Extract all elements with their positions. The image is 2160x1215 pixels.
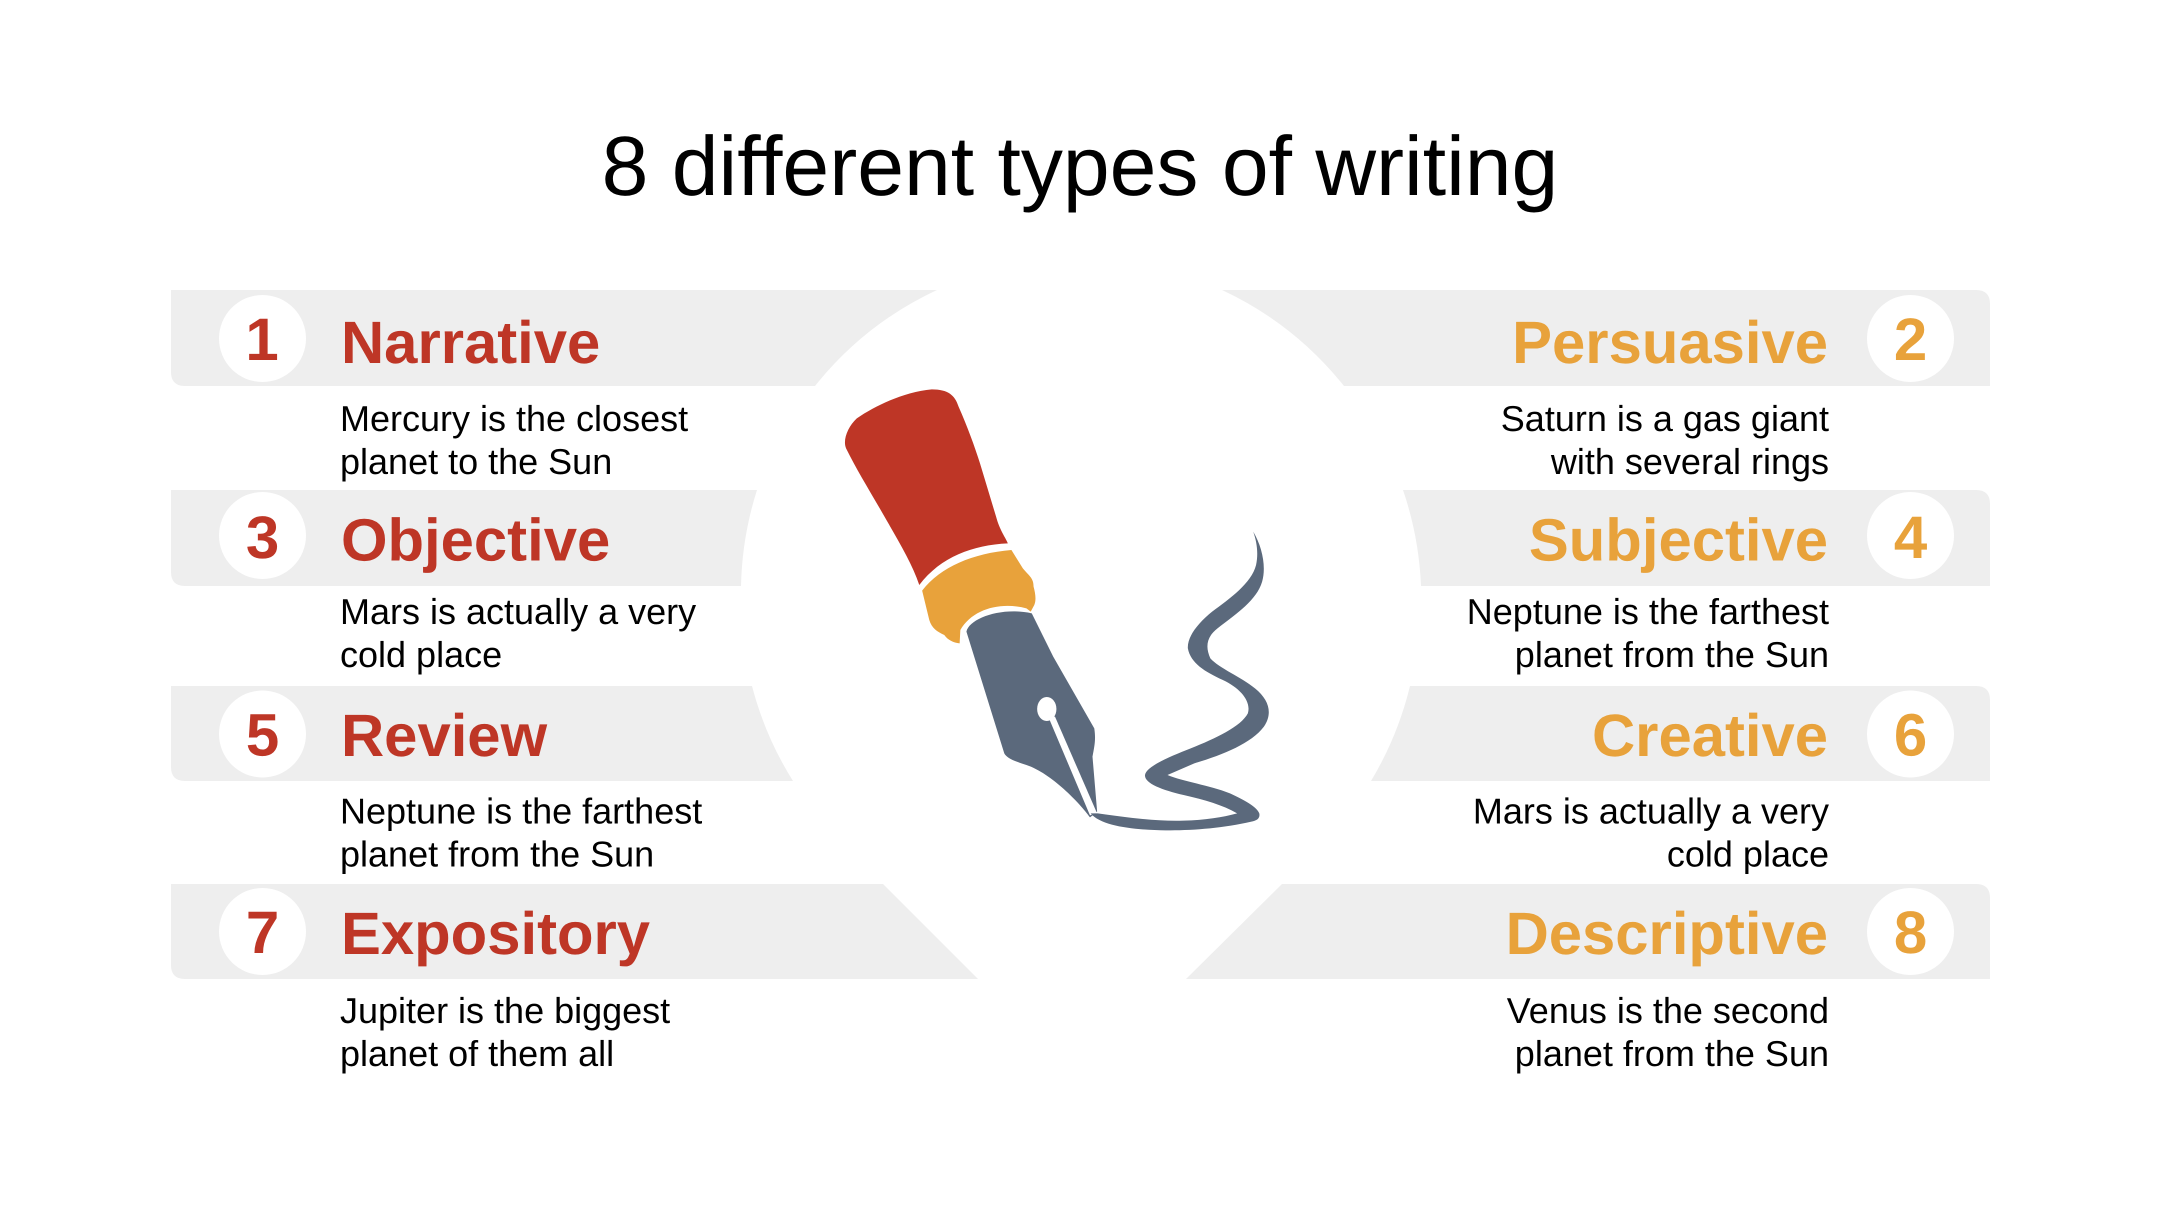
panel: 8 Descriptive [1186, 884, 1990, 1074]
title: 8 different types of writing [602, 119, 1558, 213]
icon: fountain pen with ink stroke [845, 389, 1269, 830]
number badge 6: 6 [1894, 702, 1927, 768]
banner 2 [1222, 290, 1990, 386]
number badge 4 [1867, 492, 1954, 579]
banner 7 [171, 884, 978, 979]
description 8: Venus is the second [1507, 990, 1829, 1031]
heading: Narrative: Narrative [341, 309, 600, 376]
heading: Descriptive: Descriptive [1506, 900, 1828, 967]
description 2: with several rings [1550, 441, 1829, 482]
description 1: Mercury is the closest [340, 398, 688, 439]
banner 1 [171, 290, 937, 386]
description 3: Mars is actually a very [340, 591, 696, 632]
banner 3 [171, 490, 757, 586]
heading: Objective: Objective [341, 506, 610, 574]
pen collar [922, 550, 1035, 643]
description 5: planet from the Sun [340, 834, 654, 874]
description 7: planet of them all [340, 1033, 614, 1074]
heading: Persuasive: Persuasive [1512, 309, 1828, 376]
panel: 7 Expository [171, 884, 978, 1074]
number badge 8: 8 [1894, 899, 1927, 966]
heading: Review: Review [341, 702, 548, 769]
description 1: planet to the Sun [340, 441, 612, 482]
number badge 2: 2 [1894, 306, 1927, 373]
description 3: cold place [340, 634, 502, 675]
number badge 7 [219, 888, 306, 975]
number badge 1 [219, 295, 306, 382]
number badge 4: 4 [1894, 504, 1928, 571]
number badge 6 [1867, 690, 1954, 778]
description 8: planet from the Sun [1515, 1033, 1829, 1074]
banner 6 [1371, 686, 1990, 781]
number badge 5: 5 [246, 702, 279, 768]
nib slit [1037, 697, 1097, 815]
description 4: Neptune is the farthest [1467, 591, 1829, 632]
pen nib [966, 611, 1097, 817]
panel: 6 Creative [1371, 686, 1990, 874]
banner 5 [171, 686, 793, 781]
number badge 7: 7 [246, 899, 279, 966]
heading: Subjective: Subjective [1529, 506, 1828, 574]
number badge 8 [1867, 888, 1954, 975]
panel: 4 Subjective [1403, 490, 1990, 675]
heading: Expository: Expository [341, 900, 650, 967]
panel: 2 Persuasive [1222, 290, 1990, 482]
panel: 3 Objective [171, 490, 757, 675]
banner 8 [1186, 884, 1990, 979]
pen cap [845, 389, 1008, 585]
heading: Creative: Creative [1592, 702, 1828, 769]
number badge 2 [1867, 295, 1954, 382]
description 6: Mars is actually a very [1473, 790, 1829, 832]
description 5: Neptune is the farthest [340, 790, 702, 832]
banner 4 [1403, 490, 1990, 586]
number badge 1: 1 [245, 306, 279, 373]
description 6: cold place [1667, 834, 1829, 874]
panel: 5 Review [171, 686, 793, 874]
ink stroke [1091, 532, 1269, 830]
description 4: planet from the Sun [1515, 634, 1829, 675]
description 2: Saturn is a gas giant [1501, 398, 1829, 439]
number badge 5 [219, 690, 306, 778]
panel: 1 Narrative [171, 290, 937, 482]
number badge 3 [219, 492, 306, 579]
description 7: Jupiter is the biggest [340, 990, 670, 1031]
number badge 3: 3 [246, 504, 279, 571]
